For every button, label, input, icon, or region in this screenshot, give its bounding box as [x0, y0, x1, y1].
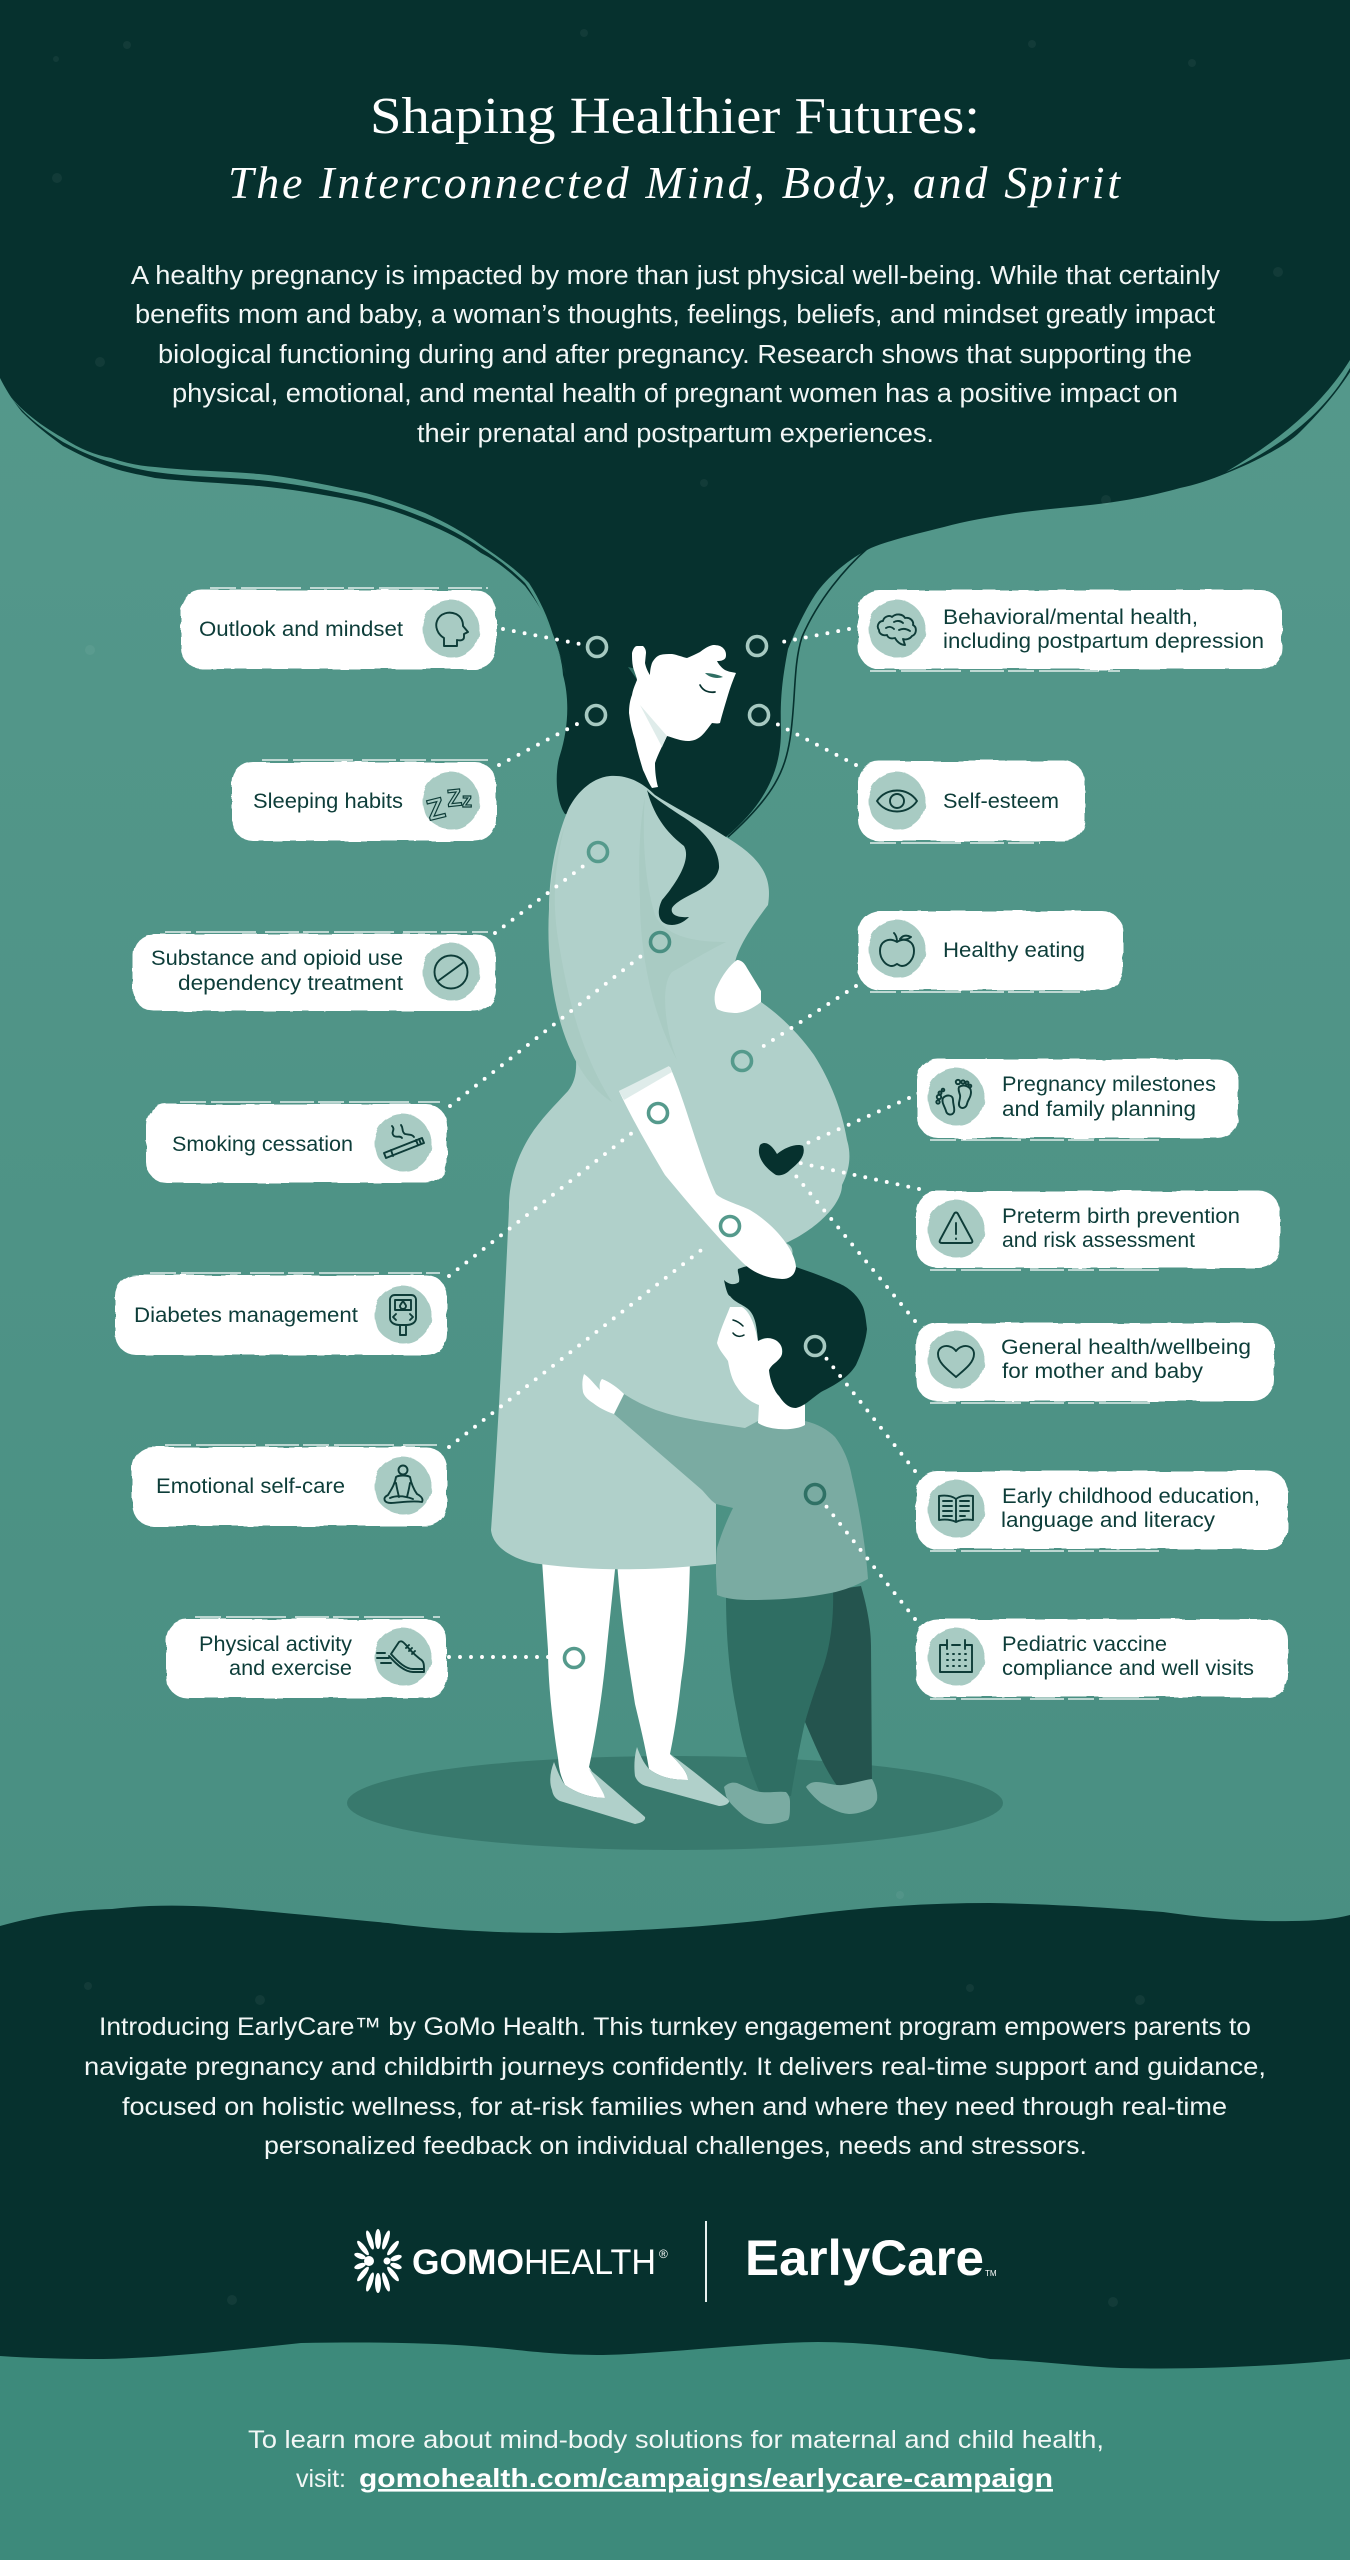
intro paragraph: benefits mom and baby, a woman’s thoughts, feelings, beliefs, and mindset greatly impact — [135, 301, 1215, 329]
callout: Pregnancy milestones: and family planning — [1002, 1098, 1196, 1121]
child shoes — [724, 1779, 877, 1824]
callout: Diabetes management: Diabetes management — [134, 1304, 358, 1327]
title — [228, 88, 1121, 208]
icon: warning triangle — [928, 1200, 984, 1258]
child sweater — [614, 1394, 868, 1600]
icon: zzz: Z — [423, 792, 448, 827]
callout: Preterm birth prevention — [916, 1191, 1280, 1270]
icon: zzz: Z — [446, 784, 463, 813]
intro paragraph: their prenatal and postpartum experiences. — [417, 420, 934, 448]
call to action text: To learn more about mind-body solutions for maternal and child health, — [248, 2426, 1104, 2454]
icon: prohibited pill — [422, 944, 480, 1000]
callout: Preterm birth prevention: and risk assessment — [1002, 1229, 1195, 1252]
child face details — [733, 1320, 744, 1336]
logo: EarlyCare: TM — [985, 2269, 997, 2278]
callout: Substance and opioid use: dependency treatment — [178, 972, 403, 995]
call to action text — [248, 2426, 1104, 2493]
footer paragraph — [84, 2013, 1266, 2160]
header dark flowing hair shape — [0, 0, 1350, 837]
icon: open book — [928, 1480, 984, 1538]
baby heart — [759, 1143, 804, 1175]
callout: Physical activity and exercise: Physical activity — [199, 1633, 353, 1656]
callout: Early childhood education: Early childhood education, — [1002, 1485, 1260, 1508]
dress shading — [548, 797, 726, 1102]
woman dress — [491, 776, 849, 1569]
icon: meditation — [374, 1458, 432, 1514]
dotted connector lines — [449, 629, 919, 1657]
callout: Early childhood education — [916, 1471, 1288, 1551]
footer paragraph: Introducing EarlyCare™ by GoMo Health. This turnkey engagement program empowers parents to — [99, 2013, 1251, 2041]
icon: glucose meter — [374, 1286, 432, 1344]
logo: GoMo Health: ® — [659, 2247, 668, 2261]
footer dark wave panel — [0, 1903, 1350, 2369]
illustration: child — [582, 1263, 877, 1824]
intro paragraph: biological functioning during and after pregnancy. Research shows that supporting the — [158, 341, 1192, 369]
woman legs — [542, 1560, 690, 1798]
illustration: pregnant woman — [491, 645, 849, 1824]
logo divider — [705, 2221, 707, 2302]
footer paragraph: focused on holistic wellness, for at-risk families when and where they need through real-time — [122, 2093, 1227, 2121]
callout: Self-esteem — [858, 761, 1085, 843]
callout: Smoking cessation — [146, 1102, 447, 1183]
callout: Physical activity and exercise: and exercise — [229, 1657, 352, 1680]
callout: General health/wellbeing: for mother and baby — [1002, 1360, 1204, 1383]
icon: zzz — [422, 772, 480, 830]
icon: calendar — [928, 1628, 984, 1686]
callout: Emotional self-care — [132, 1445, 447, 1526]
callout: Behavioral/mental health — [858, 590, 1282, 671]
callout: Healthy eating: Healthy eating — [943, 939, 1085, 962]
callout: Diabetes management — [115, 1273, 447, 1355]
callout: Outlook and mindset: Outlook and mindset — [199, 618, 403, 641]
woman shoes — [550, 1747, 729, 1824]
callout: Pediatric vaccine — [916, 1619, 1288, 1699]
logo: EarlyCare: EarlyCare — [745, 2230, 984, 2286]
footer paragraph: personalized feedback on individual challenges, needs and stressors. — [264, 2132, 1087, 2160]
title: Shaping Healthier Futures: — [370, 88, 980, 145]
icon: zzz: z — [462, 790, 472, 812]
logo: GoMo Health — [353, 2229, 668, 2293]
callout: Behavioral/mental health: Behavioral/mental health, — [943, 606, 1198, 629]
child back leg — [805, 1586, 872, 1787]
ground shadow ellipse — [347, 1756, 1003, 1850]
woman lower arm resting on child — [619, 1066, 796, 1279]
callout: Preterm birth prevention: Preterm birth prevention — [1002, 1205, 1240, 1228]
intro paragraph: A healthy pregnancy is impacted by more than just physical well-being. While that certainly — [131, 262, 1220, 290]
callout: Behavioral/mental health: including postpartum depression — [943, 630, 1264, 653]
callout: Substance and opioid use: Substance and opioid use — [151, 947, 403, 970]
child hand — [582, 1374, 624, 1414]
callout: Substance and opioid use — [133, 932, 496, 1011]
sleeve cuff — [619, 1066, 672, 1100]
callout: General health/wellbeing — [916, 1323, 1274, 1403]
icon: running shoe — [374, 1628, 432, 1686]
icon: cigarette — [374, 1114, 432, 1172]
woman hair strand — [647, 790, 719, 925]
callout: Pediatric vaccine: Pediatric vaccine — [1002, 1633, 1167, 1656]
child hair — [724, 1263, 867, 1408]
footer paragraph: navigate pregnancy and childbirth journeys confidently. It delivers real-time support and guidance, — [84, 2053, 1266, 2081]
icon: apple — [868, 920, 926, 978]
callout: Physical activity and exercise — [166, 1617, 447, 1698]
call to action text: gomohealth.com/campaigns/earlycare-campaign — [359, 2463, 1053, 2493]
icon: brain — [868, 600, 926, 658]
icon: flower mark — [353, 2229, 403, 2293]
icon: heart — [928, 1332, 984, 1388]
callout: Pregnancy milestones — [917, 1059, 1238, 1140]
callout: Sleeping habits — [232, 760, 496, 841]
bottom teal band — [0, 2300, 1350, 2560]
callout: Early childhood education: language and literacy — [1001, 1509, 1216, 1532]
callout: General health/wellbeing: General health/wellbeing — [1001, 1336, 1251, 1359]
callout: Sleeping habits: Sleeping habits — [253, 790, 403, 813]
logo: GoMo Health: GOMO — [412, 2243, 524, 2282]
logo: GoMo Health: HEALTH — [524, 2243, 656, 2282]
title: The Interconnected Mind, Body, and Spirit — [228, 157, 1121, 208]
callout: Healthy eating — [858, 911, 1123, 992]
intro paragraph — [131, 262, 1220, 448]
decorative sparkle dots — [52, 29, 1283, 1984]
callout: Outlook and mindset — [181, 588, 496, 669]
child front leg — [726, 1590, 833, 1796]
callout: Pediatric vaccine: compliance and well visits — [1002, 1657, 1254, 1680]
intro paragraph: physical, emotional, and mental health of pregnant women has a positive impact on — [172, 380, 1178, 408]
teal background — [0, 0, 1350, 1950]
footer sparkle dots — [84, 1982, 1145, 2307]
callout: Smoking cessation: Smoking cessation — [172, 1133, 353, 1156]
callout: Self-esteem: Self-esteem — [943, 790, 1059, 813]
icon: head — [422, 600, 480, 658]
child face and neck — [717, 1307, 805, 1429]
icon: baby feet — [928, 1068, 984, 1126]
call to action text: visit: — [296, 2465, 346, 2493]
woman upper hand — [715, 960, 761, 1013]
connector rings — [564, 636, 824, 1668]
icon: eye — [868, 772, 926, 830]
callout: Emotional self-care: Emotional self-care — [156, 1475, 345, 1498]
callout: Pregnancy milestones: Pregnancy milestones — [1002, 1073, 1216, 1096]
woman head and neck — [628, 645, 736, 788]
